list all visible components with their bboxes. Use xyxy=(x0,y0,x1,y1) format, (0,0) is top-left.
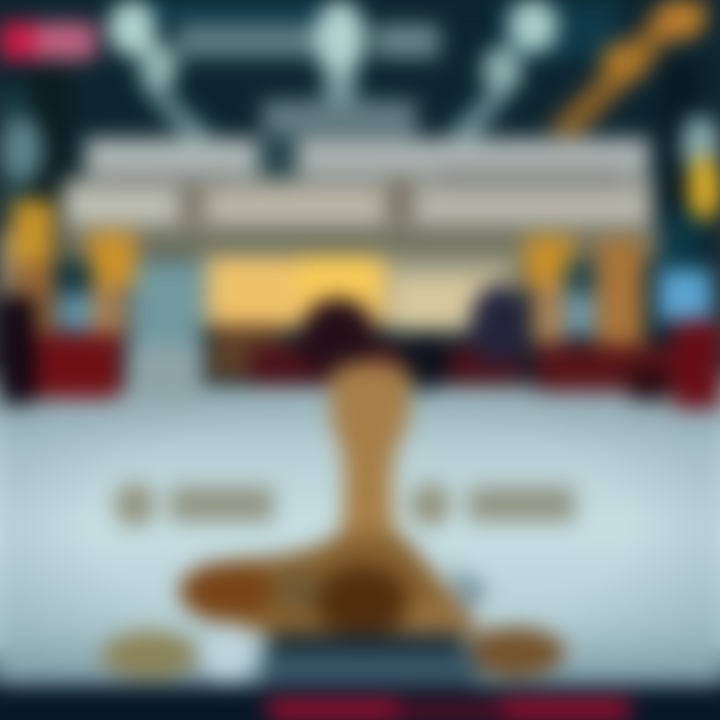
panel: dark ceiling xyxy=(0,0,720,385)
panel: left pillars and seating xyxy=(0,200,136,404)
panel: floor shadow xyxy=(200,622,477,692)
icon: golden trophy figure xyxy=(102,361,565,679)
footer: dark strip with red bar xyxy=(0,686,720,720)
panel: right pillars and seating xyxy=(524,155,720,408)
panel: orange truss top right xyxy=(545,0,715,137)
panel: central crowd xyxy=(210,285,526,390)
panel: warm stage backdrop xyxy=(60,228,660,400)
text block: left stat xyxy=(114,483,274,527)
text block: right stat xyxy=(409,483,575,527)
panel: arena floor xyxy=(0,388,720,692)
icon: red logo badge xyxy=(0,22,96,60)
panel: ceiling lights xyxy=(1,0,719,183)
heading: blurred title xyxy=(62,138,654,228)
panel: top banner text xyxy=(176,24,440,136)
